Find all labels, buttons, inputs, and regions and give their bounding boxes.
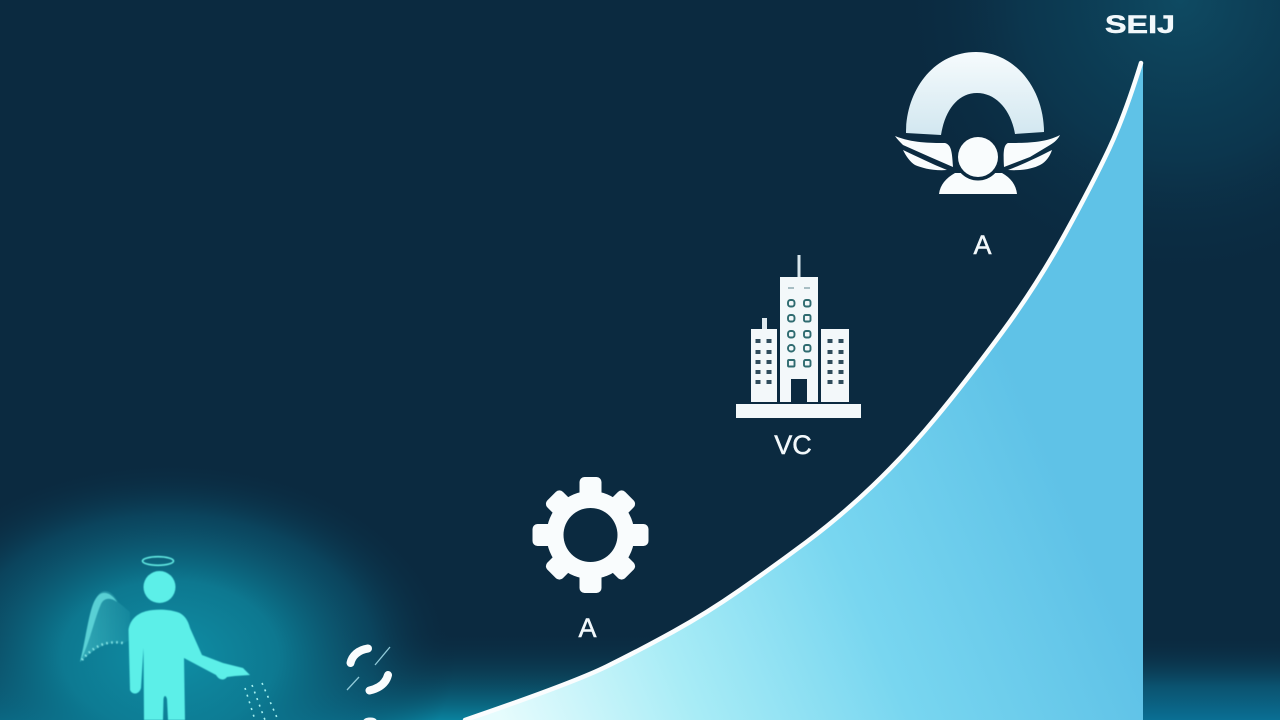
left wing — [895, 136, 953, 170]
icon: dotted seed trail — [245, 683, 278, 720]
icon: office buildings — [736, 255, 861, 418]
buildings label: VC — [774, 430, 812, 460]
side tower windows — [756, 339, 844, 384]
head — [144, 571, 176, 603]
arch — [906, 52, 1044, 135]
top right label: SEIJ — [1105, 11, 1175, 39]
icon: gear — [532, 477, 648, 593]
shoulders — [939, 173, 1017, 194]
icon: angel investor figure — [80, 557, 250, 720]
centre tower windows — [788, 288, 810, 366]
gear label: A — [578, 613, 597, 643]
wing — [80, 591, 130, 662]
growth curve line — [465, 63, 1141, 720]
head — [958, 137, 998, 177]
angel label: A — [973, 230, 992, 260]
right wing — [1004, 135, 1060, 170]
icon: handshake links — [347, 647, 390, 690]
head outline — [954, 134, 1002, 180]
icon: winged person under arch — [895, 52, 1060, 194]
body — [128, 610, 250, 720]
halo — [142, 557, 174, 565]
growth curve area — [465, 63, 1143, 720]
